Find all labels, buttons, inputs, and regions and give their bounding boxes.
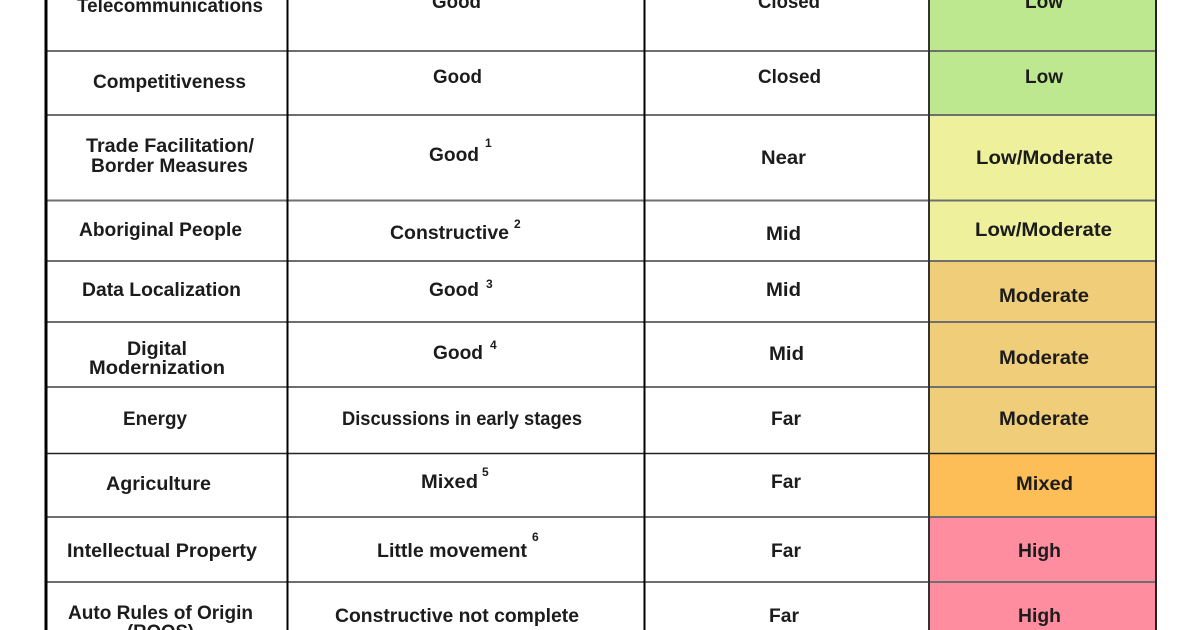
row: Auto Rules of Origin (ROOS) <box>68 602 1061 630</box>
row: Agriculture: 5 <box>482 465 489 479</box>
row: Data Localization: Good <box>429 279 479 301</box>
row: Trade Facilitation / Border Measures: Trade Facilitation/ <box>86 135 255 157</box>
row: Intellectual Property: 6 <box>532 530 539 544</box>
row: Energy: Energy <box>123 408 187 430</box>
row: Agriculture: Agriculture <box>106 473 211 495</box>
row: Agriculture: Far <box>771 471 801 493</box>
row: Aboriginal People: Low/Moderate <box>975 219 1112 241</box>
row: Energy: Discussions in early stages <box>342 408 582 430</box>
row: Agriculture: Mixed <box>1016 473 1073 495</box>
row: Intellectual Property: Little movement <box>377 540 528 562</box>
row: Digital Modernization: Modernization <box>89 357 225 379</box>
row: Data Localization: Moderate <box>999 285 1089 307</box>
row: Intellectual Property: Intellectual Property <box>67 540 257 562</box>
risk column colour fills <box>929 0 1156 630</box>
row: Trade Facilitation / Border Measures: Low/Moderate <box>976 147 1113 169</box>
row: Trade Facilitation / Border Measures: Near <box>761 147 806 169</box>
row: Digital Modernization: Mid <box>769 343 804 365</box>
row: Agriculture <box>106 465 1073 495</box>
row: Intellectual Property: High <box>1018 540 1061 562</box>
row: Trade Facilitation / Border Measures <box>86 135 1113 177</box>
row: Energy <box>123 408 1089 430</box>
row: Competitiveness: Low <box>1025 66 1064 88</box>
row: Aboriginal People: 2 <box>514 217 521 231</box>
row: Auto Rules of Origin (ROOS): Constructive not complete <box>335 605 579 627</box>
row: Agriculture: Mixed <box>421 471 478 493</box>
row: Competitiveness: Competitiveness <box>93 71 246 93</box>
row: Auto Rules of Origin (ROOS): Auto Rules of Origin <box>68 602 253 624</box>
row: Digital Modernization: Good <box>433 342 483 364</box>
row: Aboriginal People: Aboriginal People <box>79 219 242 241</box>
row: Competitiveness: Closed <box>758 66 821 88</box>
row: Data Localization: Mid <box>766 279 801 301</box>
row: Aboriginal People: Constructive <box>390 222 509 244</box>
row: Energy: Far <box>771 408 801 430</box>
row: Auto Rules of Origin (ROOS): High <box>1018 605 1061 627</box>
row: Digital Modernization: Digital <box>127 338 187 360</box>
row: Data Localization: Data Localization <box>82 279 241 301</box>
row: Auto Rules of Origin (ROOS): Far <box>769 605 799 627</box>
row: Trade Facilitation / Border Measures: 1 <box>485 136 492 150</box>
row: Competitiveness <box>93 66 1064 93</box>
row: Aboriginal People: Mid <box>766 223 801 245</box>
row: Intellectual Property: Far <box>771 540 801 562</box>
row: Telecommunications <box>77 0 1064 17</box>
row: Energy: Moderate <box>999 408 1089 430</box>
row: Digital Modernization: 4 <box>490 338 497 352</box>
row: Aboriginal People <box>79 217 1112 245</box>
row: Digital Modernization: Moderate <box>999 347 1089 369</box>
row: Competitiveness: Good <box>433 66 482 88</box>
row: Trade Facilitation / Border Measures: Border Measures <box>91 155 248 177</box>
row: Data Localization: 3 <box>486 277 493 291</box>
row: Trade Facilitation / Border Measures: Good <box>429 144 479 166</box>
row: Data Localization <box>82 277 1089 307</box>
row: Intellectual Property <box>67 530 1061 562</box>
row: Digital Modernization <box>89 338 1089 379</box>
